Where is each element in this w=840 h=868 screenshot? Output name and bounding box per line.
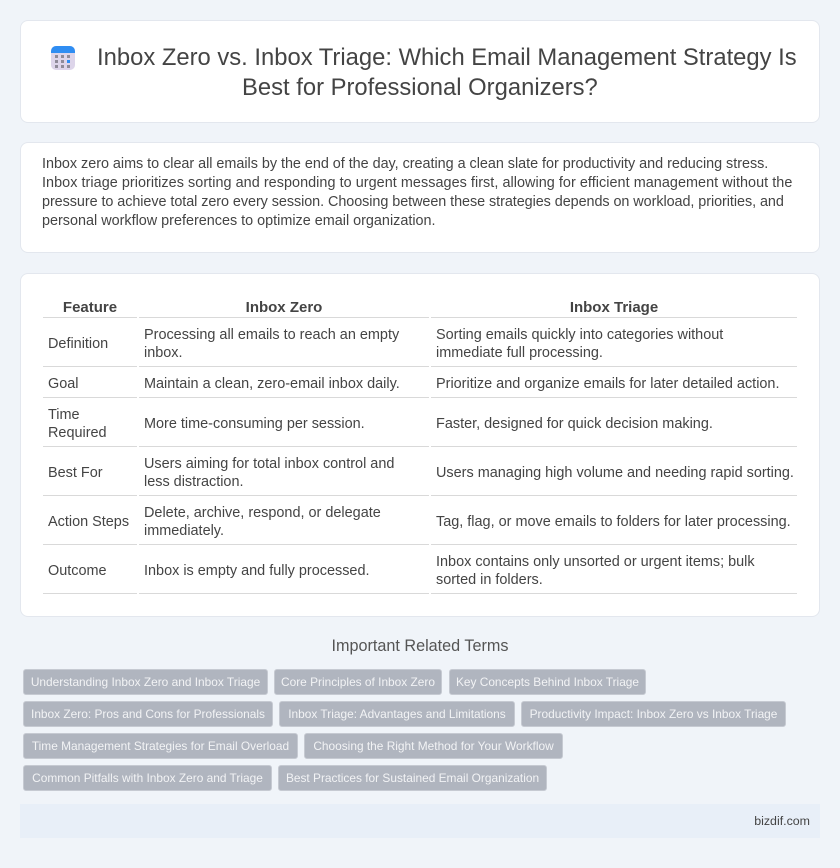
related term tags: Common Pitfalls with Inbox Zero and Triage (32, 771, 263, 785)
footer bar (20, 804, 820, 838)
related term tags: Time Management Strategies for Email Overload (32, 739, 289, 753)
related term tags: Choosing the Right Method for Your Workflow (313, 739, 554, 753)
intro paragraph: pressure to achieve total zero every session. Choosing between these strategies depends on workload, priorities, and (42, 194, 784, 210)
comparison table: Maintain a clean, zero-email inbox daily. (144, 376, 400, 392)
comparison table: less distraction. (144, 474, 244, 490)
intro paragraph: personal workflow preferences to optimize email organization. (42, 213, 436, 229)
title: Inbox Zero vs. Inbox Triage: Which Email Management Strategy Is (97, 44, 797, 71)
comparison table: Goal (48, 376, 78, 392)
related term tags (23, 669, 786, 791)
comparison table: Definition (48, 336, 108, 352)
comparison table: More time-consuming per session. (144, 416, 365, 432)
related term tags: Key Concepts Behind Inbox Triage (456, 675, 639, 689)
panel: comparison table card (20, 273, 820, 617)
comparison table: Users managing high volume and needing rapid sorting. (436, 465, 794, 481)
intro paragraph (42, 156, 792, 229)
comparison table: Inbox Zero (246, 299, 322, 316)
comparison table: Tag, flag, or move emails to folders for later processing. (436, 514, 791, 530)
comparison table: Processing all emails to reach an empty (144, 327, 399, 343)
footer site name: bizdif.com (754, 814, 810, 828)
comparison table: Faster, designed for quick decision making. (436, 416, 713, 432)
comparison table: Inbox is empty and fully processed. (144, 563, 370, 579)
title: Best for Professional Organizers? (242, 74, 598, 101)
heading: related terms: Important Related Terms (332, 637, 508, 655)
comparison table: Feature (63, 299, 117, 316)
related term tags: Understanding Inbox Zero and Inbox Triage (31, 675, 260, 689)
comparison table: inbox. (144, 345, 183, 361)
panel: intro text card (20, 142, 820, 253)
panel: title card (20, 20, 820, 123)
related term tags: Inbox Zero: Pros and Cons for Professionals (31, 707, 265, 721)
related term tags: Productivity Impact: Inbox Zero vs Inbox Triage (530, 707, 777, 721)
related term tags: Inbox Triage: Advantages and Limitations (288, 707, 506, 721)
comparison table: immediately. (144, 523, 224, 539)
comparison table: Best For (48, 465, 103, 481)
title (97, 44, 797, 101)
comparison table: Required (48, 425, 107, 441)
comparison table: Delete, archive, respond, or delegate (144, 505, 381, 521)
related term tags: Best Practices for Sustained Email Organization (286, 771, 539, 785)
comparison table: Inbox Triage (570, 299, 658, 316)
comparison table: Time (48, 407, 80, 423)
comparison table: Outcome (48, 563, 107, 579)
icon: calendar (51, 46, 75, 70)
intro paragraph: Inbox triage prioritizes sorting and responding to urgent messages first, allowing for efficient management without the (42, 175, 792, 191)
related term tags: Core Principles of Inbox Zero (281, 675, 435, 689)
comparison table: Action Steps (48, 514, 129, 530)
comparison table: Prioritize and organize emails for later detailed action. (436, 376, 779, 392)
comparison table: sorted in folders. (436, 572, 543, 588)
comparison table (43, 299, 797, 594)
comparison table: Sorting emails quickly into categories without (436, 327, 723, 343)
intro paragraph: Inbox zero aims to clear all emails by the end of the day, creating a clean slate for productivity and reducing stress. (42, 156, 768, 172)
comparison table: Inbox contains only unsorted or urgent items; bulk (436, 554, 755, 570)
comparison table: Users aiming for total inbox control and (144, 456, 394, 472)
comparison table: immediate full processing. (436, 345, 603, 361)
